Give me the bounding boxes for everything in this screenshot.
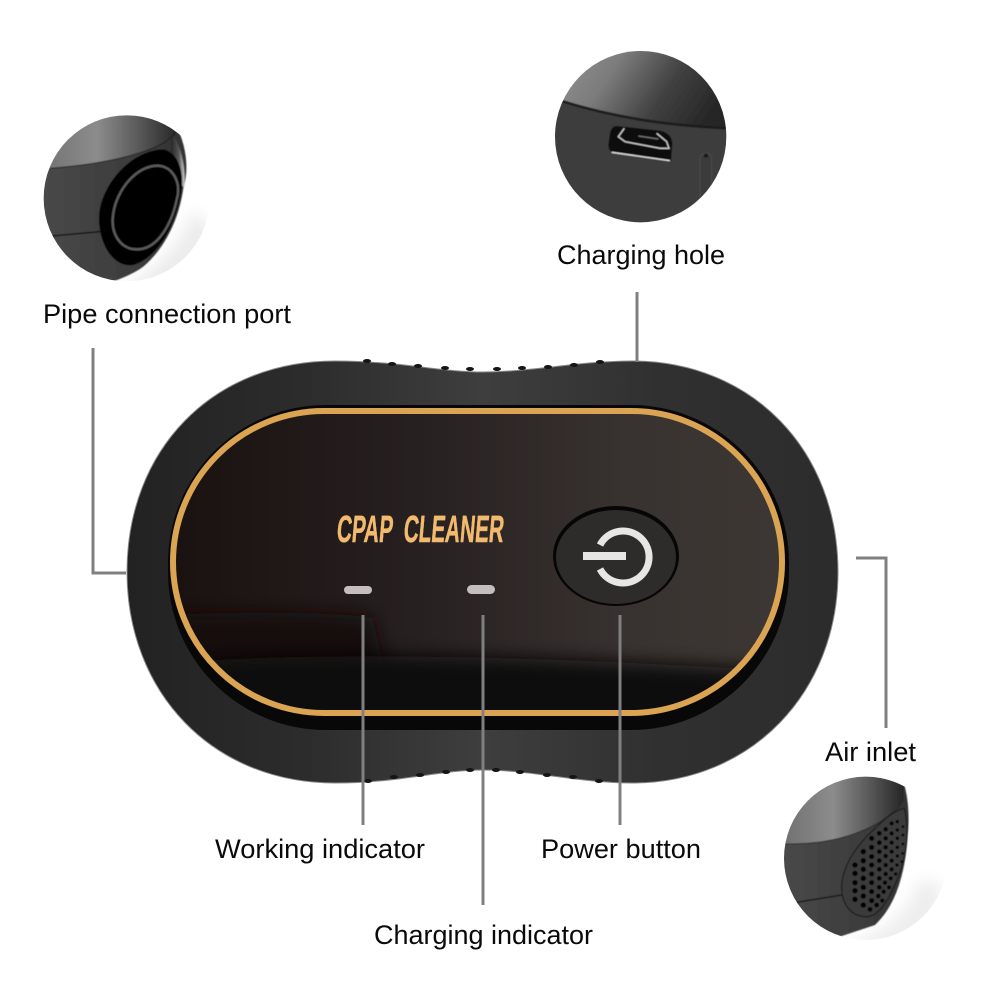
label: pipe connection port: Pipe connection port: [43, 299, 291, 329]
detail circle: charging hole: [555, 51, 726, 222]
leader line: power button: [618, 615, 622, 825]
grille: [842, 808, 907, 917]
panel: glossy face with gold ring: [170, 408, 785, 716]
label: charging hole: Charging hole: [557, 240, 725, 270]
device: CPAP cleaner body: [127, 359, 838, 783]
working indicator LED: [344, 586, 372, 594]
black band around the panel: [168, 405, 789, 730]
detail circle: pipe connection port: [44, 115, 206, 281]
port opening: [99, 149, 182, 265]
label: air inlet: Air inlet: [825, 737, 917, 767]
leader line: charging hole: [636, 292, 638, 362]
label: working indicator: Working indicator: [215, 834, 425, 864]
power button: [553, 506, 679, 606]
leader line: charging indicator: [482, 615, 484, 905]
label: power button: Power button: [541, 834, 701, 864]
label: charging indicator: Charging indicator: [374, 920, 593, 950]
product name: CPAP CLEANER: CPAP CLEANER: [335, 509, 506, 551]
leader line: air inlet: [856, 558, 886, 728]
leader line: working indicator: [362, 615, 364, 825]
charging indicator LED: [467, 585, 495, 594]
detail circle: air inlet: [784, 776, 940, 940]
leader line: pipe connection port: [93, 348, 126, 573]
